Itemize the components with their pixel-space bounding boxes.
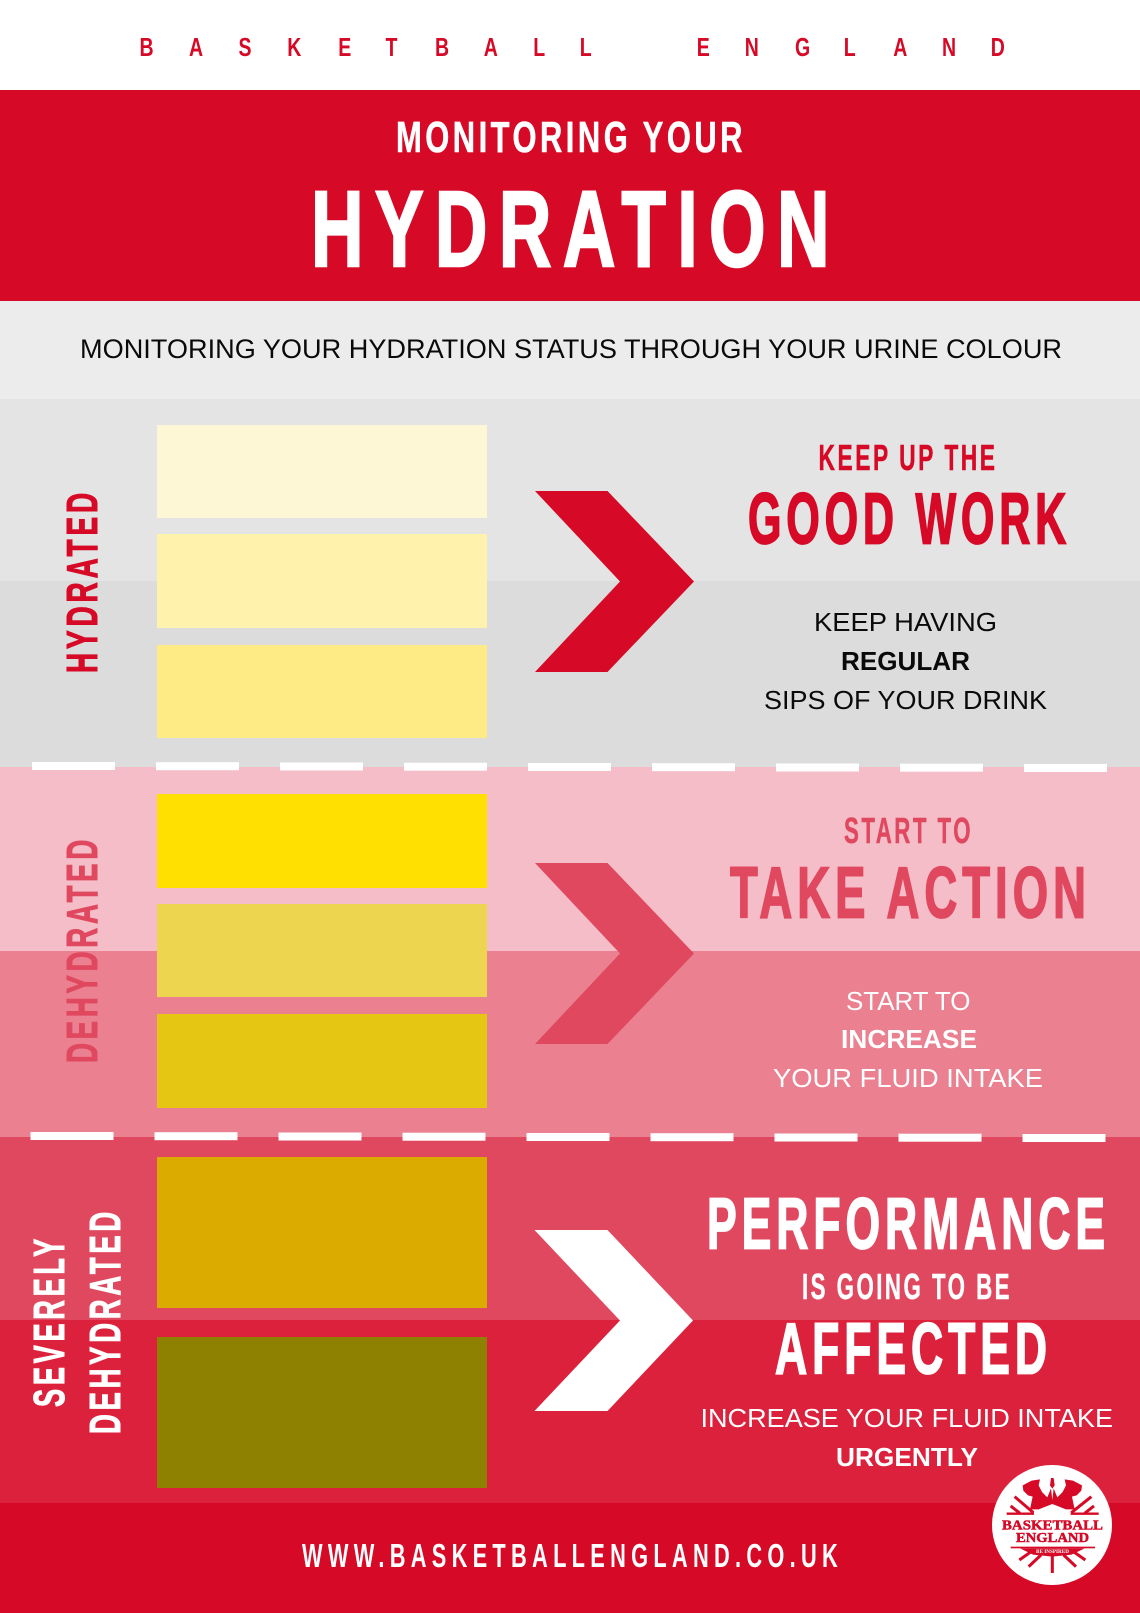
dehydrated advice text: START TO [846,986,970,1016]
icon: basketball england logo: BE INSPIRED [1036,1550,1069,1555]
severe colour swatches [157,1157,487,1488]
severe advice text: INCREASE YOUR FLUID INTAKE [700,1403,1113,1433]
panel: hydrated [0,399,1140,767]
hydrated side label: HYDRATED [58,489,107,673]
title line: monitoring your: MONITORING YOUR [396,113,746,162]
arrow: dehydrated chevron [535,863,694,1044]
subtitle text: MONITORING YOUR HYDRATION STATUS THROUGH YOUR URINE COLOUR [80,334,1062,364]
dehydrated advice text: INCREASE [841,1024,977,1054]
severe advice text [700,1403,1113,1472]
hydrated heading small: KEEP UP THE [818,437,998,478]
website url: WWW.BASKETBALLENGLAND.CO.UK [302,1537,843,1574]
hydrated colour swatches [157,425,487,738]
panel: dehydrated [0,767,1140,1137]
dehydrated heading small: START TO [844,810,973,851]
arrow: hydrated chevron [535,491,694,672]
icon: basketball england logo [992,1465,1112,1585]
arrow: severe chevron [534,1230,693,1411]
severely dehydrated side label: SEVERELY [25,1235,74,1407]
severely dehydrated side label [25,1208,130,1434]
hydrated advice text: SIPS OF YOUR DRINK [764,685,1048,715]
brand heading: BASKETBALL ENGLAND [140,32,1005,62]
hydrated advice text [764,607,1048,715]
dehydrated advice text [773,986,1043,1093]
dehydrated colour swatches [157,794,487,1108]
dehydrated advice text: YOUR FLUID INTAKE [773,1063,1043,1093]
logo wordmark: BASKETBALL [1002,1518,1103,1534]
panel: footer [0,1503,1140,1613]
severe advice text: URGENTLY [836,1442,978,1472]
panel: title banner [0,90,1140,301]
hydrated advice text: REGULAR [841,646,970,676]
severely dehydrated side label: DEHYDRATED [81,1208,130,1434]
title: hydration: HYDRATION [311,168,841,289]
severe heading: is going to be: IS GOING TO BE [802,1266,1012,1307]
icon: basketball england logo: ENGLAND [1016,1531,1089,1546]
panel: subtitle strip [0,301,1140,399]
panel: severely dehydrated [0,1137,1140,1503]
hydrated advice text: KEEP HAVING [814,607,997,637]
dehydrated side label: DEHYDRATED [58,836,107,1063]
